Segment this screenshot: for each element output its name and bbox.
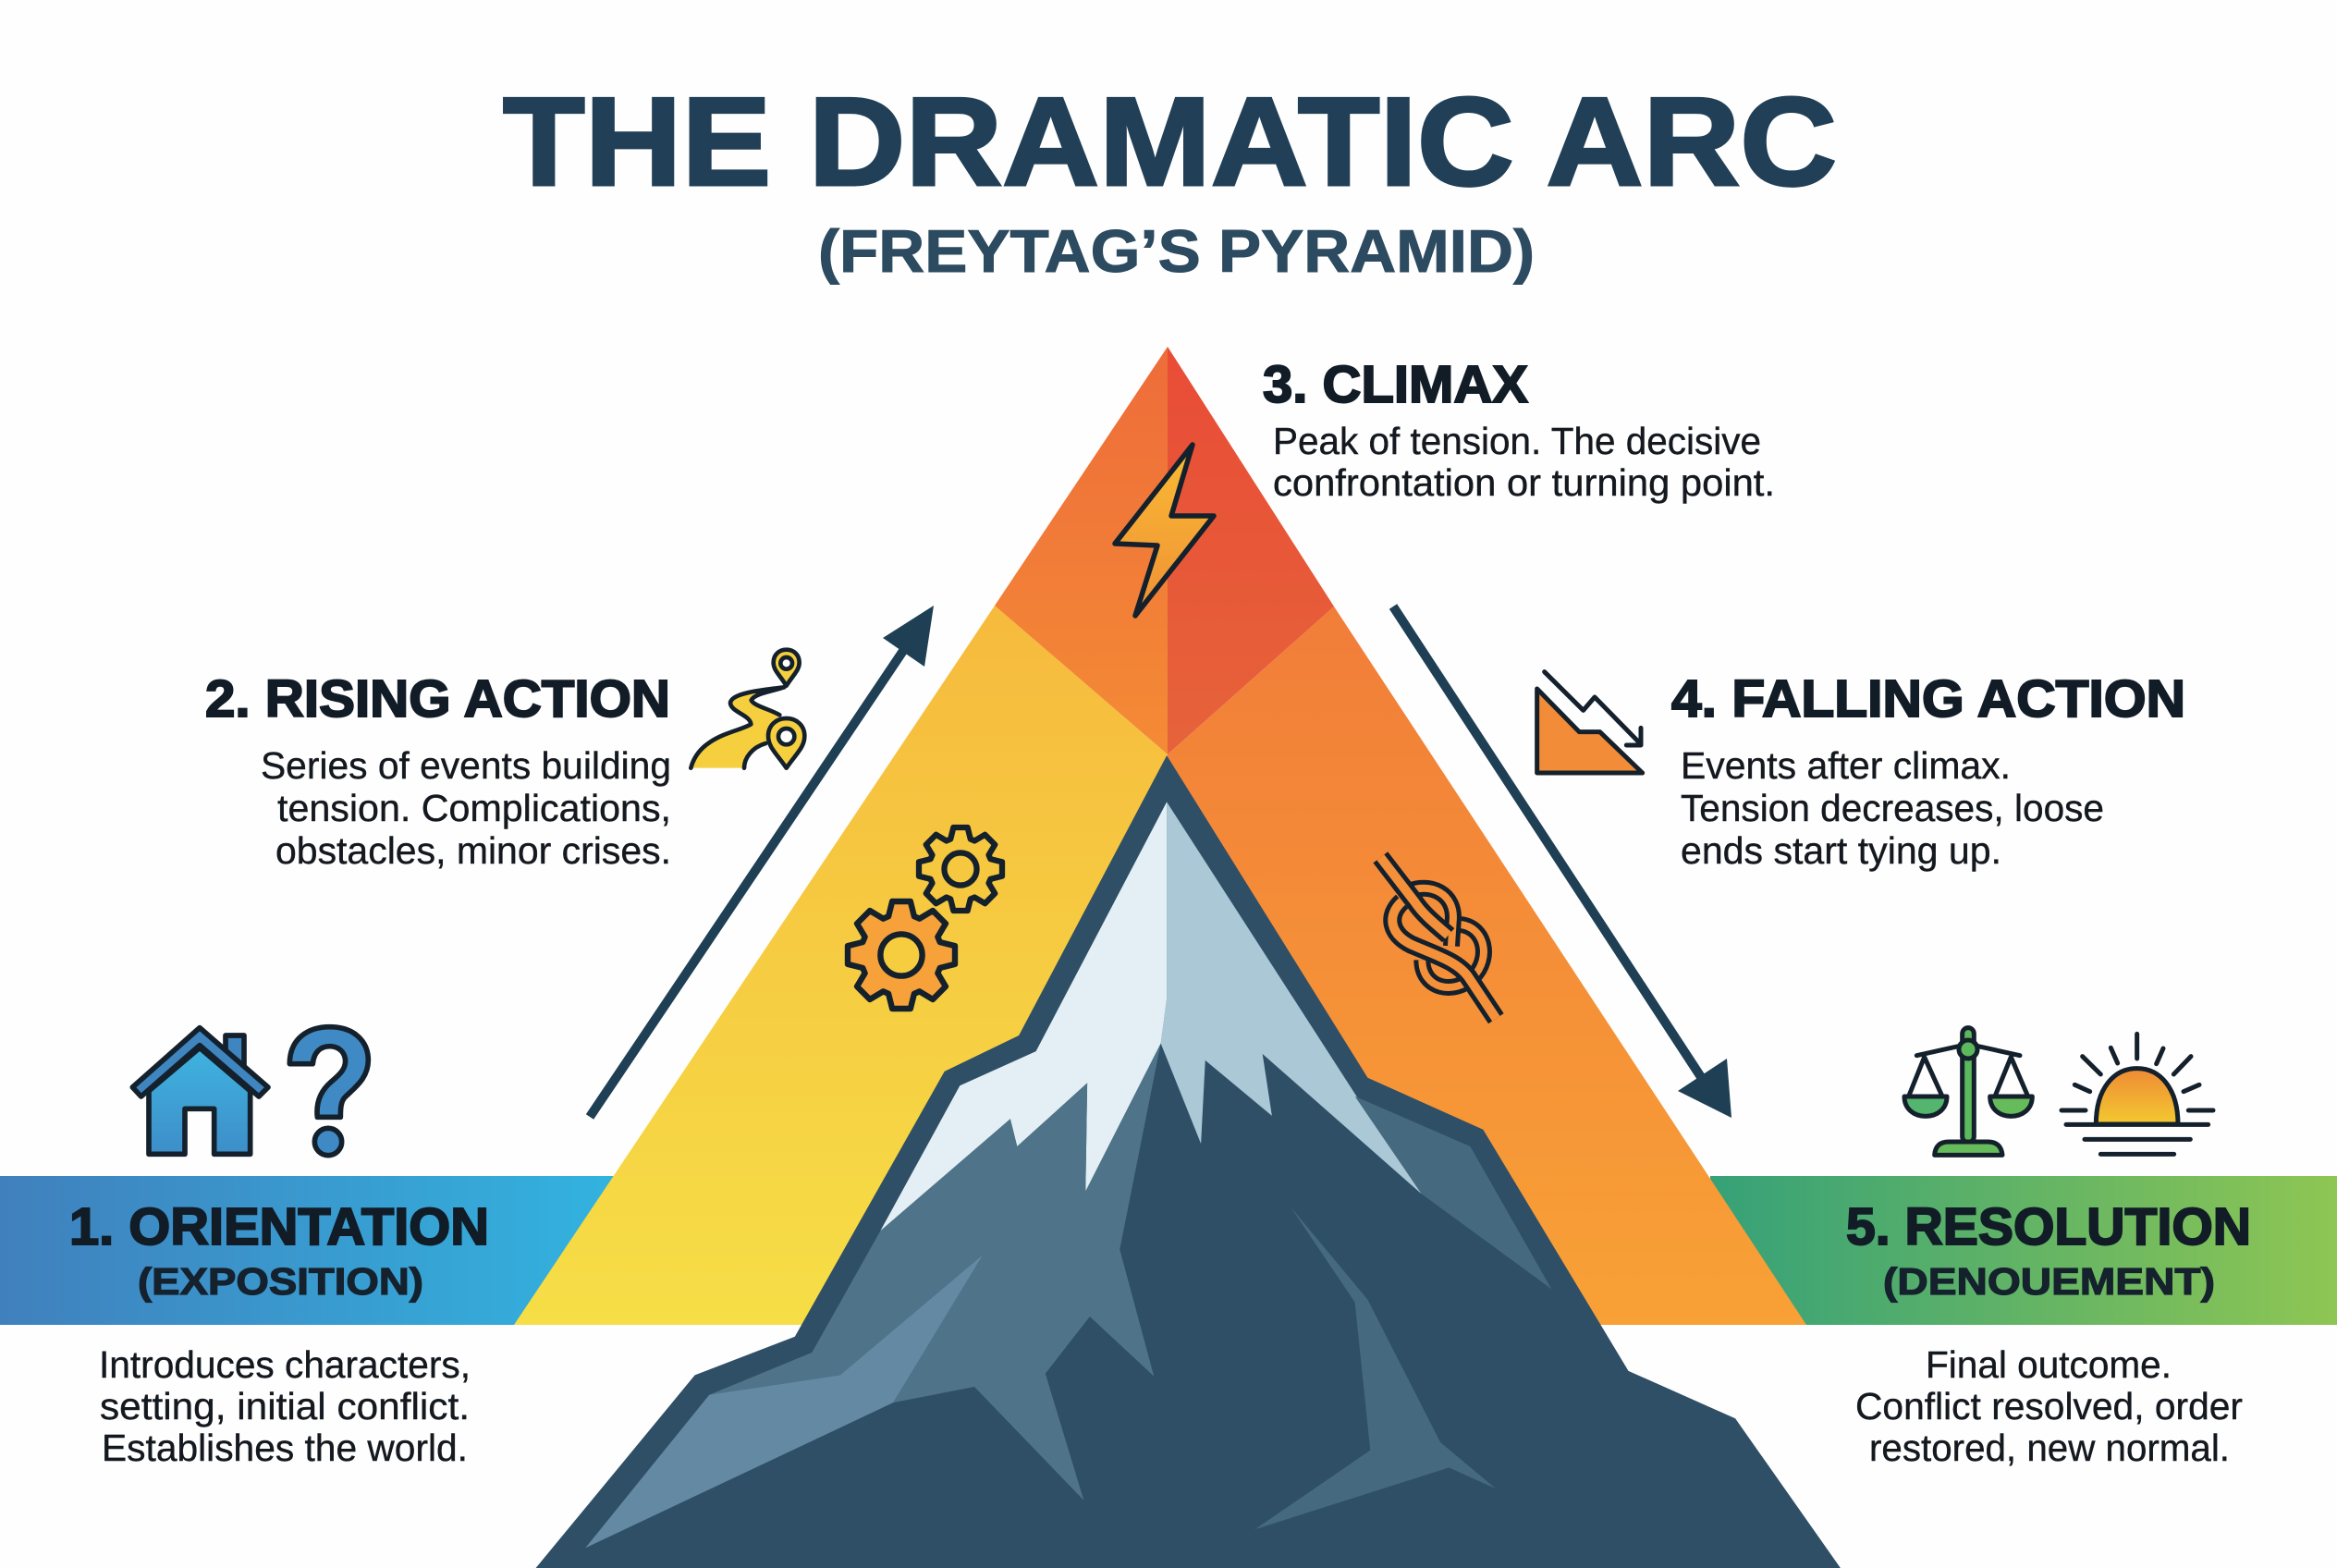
description: resolution: Final outcome. [1926, 1343, 2172, 1386]
description: orientation: Introduces characters, [99, 1343, 471, 1386]
icon: gears [848, 827, 1002, 1009]
panel: 1 orientation [0, 1176, 629, 1469]
subheading: exposition: (EXPOSITION) [138, 1260, 423, 1303]
mountain [536, 755, 1841, 1568]
panel: 4 falling action [1671, 669, 2185, 872]
snow cap: shaded side [1161, 802, 1422, 1194]
description: orientation: setting, initial conflict. [100, 1385, 470, 1427]
mountain silhouette [536, 755, 1841, 1568]
snow cap: lit side [880, 802, 1167, 1231]
icon: lightning bolt [1115, 445, 1214, 616]
icon: balance scales [1904, 1028, 2032, 1155]
icon: falling trend [1537, 672, 1643, 773]
heading: rising action: 2. RISING ACTION [205, 669, 670, 729]
description: falling action: ends start tying up. [1681, 829, 2001, 872]
description: orientation: Establishes the world. [102, 1427, 468, 1469]
icon: winding road with map pins [691, 650, 804, 768]
description: climax [1273, 420, 1775, 504]
pyramid segment: climax right [1168, 347, 1334, 754]
blue band [0, 1176, 629, 1325]
pyramid segment: climax left [995, 347, 1168, 754]
pyramid [514, 347, 1806, 1325]
description: climax: Peak of tension. The decisive [1273, 420, 1761, 462]
description: climax: confrontation or turning point. [1273, 461, 1775, 504]
green band [1710, 1176, 2337, 1325]
icon: setting sun [2062, 1034, 2213, 1154]
rock face: left [709, 1044, 1161, 1501]
description: falling action: Tension decreases, loose [1681, 787, 2104, 829]
arrow: falling tension [1393, 606, 1731, 1118]
icon: knot [1380, 857, 1496, 1019]
large gear [848, 901, 955, 1009]
subheading: denouement: (DENOUEMENT) [1883, 1260, 2215, 1303]
description: resolution: Conflict resolved, order [1855, 1385, 2243, 1427]
icon: house [132, 1028, 268, 1154]
description: falling action [1681, 744, 2104, 872]
description: orientation [99, 1343, 471, 1469]
description: resolution: restored, new normal. [1869, 1427, 2230, 1469]
description: resolution [1855, 1343, 2243, 1469]
pyramid segment: rising action [514, 606, 1168, 1325]
subtitle: (FREYTAG’S PYRAMID) [818, 217, 1535, 285]
rock ridge: right [1254, 1207, 1496, 1529]
description: falling action: Events after climax. [1681, 744, 2011, 787]
rock face: right [1355, 1096, 1551, 1289]
heading: resolution: 5. RESOLUTION [1846, 1197, 2251, 1256]
pyramid segment: falling action [1168, 606, 1806, 1325]
icon: question mark [289, 1027, 368, 1156]
panel: 5 resolution [1710, 1176, 2337, 1469]
heading: orientation: 1. ORIENTATION [69, 1197, 489, 1256]
small gear [919, 827, 1002, 911]
panel: 3 climax [1263, 355, 1775, 504]
description: rising action: Series of events building [261, 744, 671, 787]
description: rising action: obstacles, minor crises. [275, 829, 671, 872]
description: rising action: tension. Complications, [277, 787, 671, 829]
rock face: light left [585, 1255, 983, 1548]
heading: falling action: 4. FALLING ACTION [1671, 669, 2185, 729]
panel: 2 rising action [205, 669, 671, 872]
title: THE DRAMATIC ARC [503, 71, 1837, 212]
heading: climax: 3. CLIMAX [1263, 355, 1528, 414]
arrow: rising tension [590, 606, 934, 1117]
description: rising action [261, 744, 671, 872]
